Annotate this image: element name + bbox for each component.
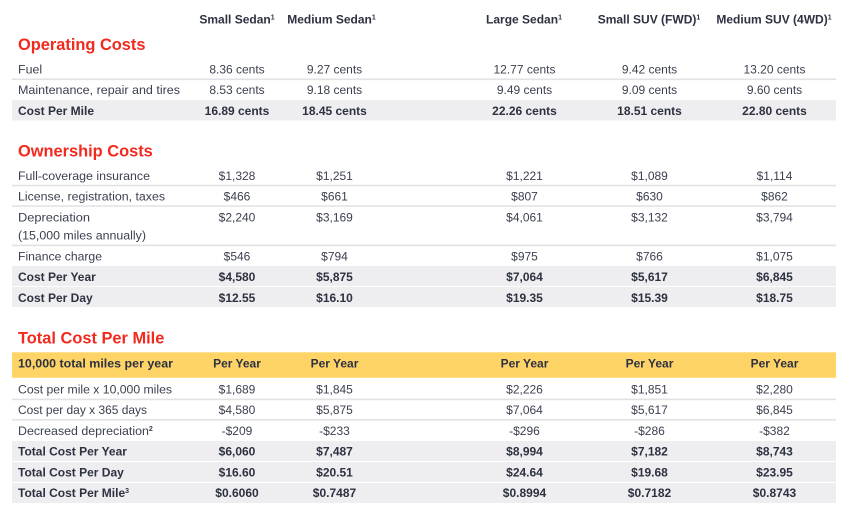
column headers: 1 bbox=[372, 14, 376, 22]
row: cost per day x 365: $5,875 bbox=[316, 403, 353, 417]
row: cost per year: $7,064 bbox=[506, 270, 543, 284]
row: total cost per year bbox=[18, 444, 793, 458]
row: insurance: $1,251 bbox=[316, 169, 353, 183]
row: cost per day x 365 bbox=[18, 403, 793, 417]
row: total cost per year: $6,060 bbox=[219, 444, 256, 458]
row: cost per mile x 10,000: Cost per mile x 10,000 miles bbox=[18, 382, 172, 396]
row: depreciation: Depreciation bbox=[18, 210, 90, 224]
row: maintenance: 9.49 cents bbox=[497, 83, 552, 97]
row: yellow header: 10,000 total miles per year bbox=[18, 356, 173, 370]
row: total cost per mile: Total Cost Per Mile bbox=[18, 486, 125, 500]
row: cost per year bbox=[18, 270, 793, 284]
row: cost per mile: Cost Per Mile bbox=[18, 104, 94, 118]
row: total cost per mile: $0.7182 bbox=[628, 486, 672, 500]
row: fuel bbox=[18, 62, 806, 76]
row: finance charge: $1,075 bbox=[756, 250, 793, 264]
row: cost per day x 365: $6,845 bbox=[756, 403, 793, 417]
row: total cost per day: Total Cost Per Day bbox=[18, 466, 124, 480]
row: decreased depreciation: 2 bbox=[149, 426, 153, 433]
panel: operating costs table bbox=[12, 62, 836, 120]
row: cost per year: $6,845 bbox=[756, 270, 793, 284]
row: cost per year: Cost Per Year bbox=[18, 270, 96, 284]
row: license: License, registration, taxes bbox=[18, 190, 165, 204]
row: cost per day: $19.35 bbox=[506, 291, 543, 305]
row: finance charge: $766 bbox=[636, 250, 663, 264]
row: insurance bbox=[18, 169, 793, 183]
row: cost per day x 365: Cost per day x 365 days bbox=[18, 403, 147, 417]
panel: ownership costs table bbox=[12, 169, 836, 307]
row: yellow header bbox=[18, 356, 799, 370]
row: cost per day bbox=[18, 291, 793, 305]
row: cost per day x 365: $4,580 bbox=[219, 403, 256, 417]
row: fuel: 12.77 cents bbox=[493, 62, 556, 76]
row: depreciation bbox=[18, 210, 793, 242]
row: total cost per mile: $0.8743 bbox=[753, 486, 797, 500]
row: cost per mile x 10,000: $2,226 bbox=[506, 382, 543, 396]
panel: total cost table bbox=[12, 352, 836, 503]
row: cost per year: $5,617 bbox=[631, 270, 668, 284]
row: cost per mile x 10,000: $1,851 bbox=[631, 382, 668, 396]
row: total cost per mile: 3 bbox=[125, 488, 129, 495]
column headers: Small SUV (FWD) bbox=[598, 12, 696, 26]
row: insurance: $1,089 bbox=[631, 169, 668, 183]
row: cost per day: $15.39 bbox=[631, 291, 668, 305]
row: total cost per day: $20.51 bbox=[316, 466, 353, 480]
row: maintenance: 9.60 cents bbox=[747, 83, 802, 97]
row: cost per year: $4,580 bbox=[219, 270, 256, 284]
column headers: 1 bbox=[271, 14, 275, 22]
row: total cost per year: $8,743 bbox=[756, 444, 793, 458]
row: total cost per day: $19.68 bbox=[631, 466, 668, 480]
row: depreciation: (15,000 miles annually) bbox=[18, 228, 146, 242]
row: cost per mile x 10,000: $1,689 bbox=[219, 382, 256, 396]
row: maintenance: 9.09 cents bbox=[622, 83, 677, 97]
row: cost per year: $5,875 bbox=[316, 270, 353, 284]
row: depreciation: $4,061 bbox=[506, 210, 543, 224]
row: insurance: $1,114 bbox=[757, 169, 793, 183]
row: license: $466 bbox=[224, 190, 251, 204]
row: license: $862 bbox=[761, 190, 788, 204]
heading: total cost per mile: Total Cost Per Mile bbox=[18, 330, 164, 348]
row: yellow header: Per Year bbox=[501, 356, 549, 370]
column headers: Small Sedan bbox=[199, 12, 271, 26]
row: total cost per day bbox=[18, 466, 793, 480]
row: depreciation: $2,240 bbox=[219, 210, 256, 224]
row: cost per day: Cost Per Day bbox=[18, 291, 93, 305]
row: finance charge bbox=[18, 250, 793, 264]
row: total cost per day: $23.95 bbox=[756, 466, 793, 480]
column headers: Medium Sedan bbox=[287, 12, 372, 26]
row: fuel: 9.27 cents bbox=[307, 62, 362, 76]
row: cost per mile x 10,000: $1,845 bbox=[316, 382, 353, 396]
row: license: $661 bbox=[321, 190, 348, 204]
heading: ownership costs: Ownership Costs bbox=[18, 142, 153, 160]
row: license: $807 bbox=[511, 190, 538, 204]
row: finance charge: Finance charge bbox=[18, 250, 102, 264]
row: cost per mile x 10,000: $2,280 bbox=[756, 382, 793, 396]
row: cost per mile: 18.45 cents bbox=[302, 104, 367, 118]
row: maintenance: 9.18 cents bbox=[307, 83, 362, 97]
row: decreased depreciation: -$286 bbox=[634, 424, 665, 438]
row: cost per day: $16.10 bbox=[316, 291, 353, 305]
column headers: 1 bbox=[828, 14, 832, 22]
row: finance charge: $794 bbox=[321, 250, 348, 264]
row: insurance: $1,221 bbox=[506, 169, 543, 183]
row: cost per day x 365: $7,064 bbox=[506, 403, 543, 417]
row: cost per mile bbox=[18, 104, 807, 118]
row: total cost per mile bbox=[18, 486, 797, 500]
row: cost per day: $12.55 bbox=[219, 291, 256, 305]
row: cost per mile: 18.51 cents bbox=[617, 104, 682, 118]
row: total cost per day: $16.60 bbox=[219, 466, 256, 480]
row: fuel: Fuel bbox=[18, 62, 42, 76]
row: yellow header: Per Year bbox=[626, 356, 674, 370]
row: total cost per day: $24.64 bbox=[506, 466, 543, 480]
row: decreased depreciation: -$209 bbox=[222, 424, 253, 438]
row: total cost per year: Total Cost Per Year bbox=[18, 444, 127, 458]
row: yellow header: Per Year bbox=[213, 356, 261, 370]
row: cost per mile: 22.80 cents bbox=[742, 104, 807, 118]
row: depreciation: $3,794 bbox=[756, 210, 793, 224]
heading: operating costs: Operating Costs bbox=[18, 36, 146, 54]
row: total cost per year: $7,487 bbox=[316, 444, 353, 458]
row: total cost per mile: $0.7487 bbox=[313, 486, 357, 500]
column headers bbox=[199, 12, 832, 26]
row: license: $630 bbox=[636, 190, 663, 204]
row: yellow header: Per Year bbox=[311, 356, 359, 370]
row: decreased depreciation: Decreased depreciation bbox=[18, 424, 149, 438]
row: depreciation: $3,169 bbox=[316, 210, 353, 224]
column headers: Medium SUV (4WD) bbox=[716, 12, 828, 26]
row: cost per mile: 16.89 cents bbox=[205, 104, 270, 118]
row: maintenance: Maintenance, repair and tires bbox=[18, 83, 180, 97]
row: yellow header: Per Year bbox=[751, 356, 799, 370]
column headers: 1 bbox=[696, 14, 700, 22]
row: fuel: 13.20 cents bbox=[743, 62, 806, 76]
row: decreased depreciation: -$296 bbox=[509, 424, 540, 438]
row: total cost per year: $8,994 bbox=[506, 444, 543, 458]
row: total cost per mile: $0.8994 bbox=[503, 486, 547, 500]
column headers: 1 bbox=[558, 14, 562, 22]
row: fuel: 8.36 cents bbox=[209, 62, 265, 76]
column headers: Large Sedan bbox=[486, 12, 558, 26]
row: cost per day x 365: $5,617 bbox=[631, 403, 668, 417]
row: decreased depreciation: -$233 bbox=[319, 424, 350, 438]
row: cost per day: $18.75 bbox=[756, 291, 793, 305]
row: license bbox=[18, 190, 788, 204]
row: insurance: $1,328 bbox=[219, 169, 256, 183]
row: finance charge: $546 bbox=[224, 250, 251, 264]
row: total cost per year: $7,182 bbox=[631, 444, 668, 458]
row: decreased depreciation bbox=[18, 424, 790, 438]
row: finance charge: $975 bbox=[511, 250, 538, 264]
row: fuel: 9.42 cents bbox=[622, 62, 677, 76]
row: maintenance: 8.53 cents bbox=[209, 83, 265, 97]
row: total cost per mile: $0.6060 bbox=[215, 486, 259, 500]
row: decreased depreciation: -$382 bbox=[759, 424, 790, 438]
row: maintenance bbox=[18, 83, 802, 97]
row: insurance: Full-coverage insurance bbox=[18, 169, 150, 183]
row: cost per mile: 22.26 cents bbox=[492, 104, 557, 118]
row: depreciation: $3,132 bbox=[631, 210, 668, 224]
row: cost per mile x 10,000 bbox=[18, 382, 793, 396]
